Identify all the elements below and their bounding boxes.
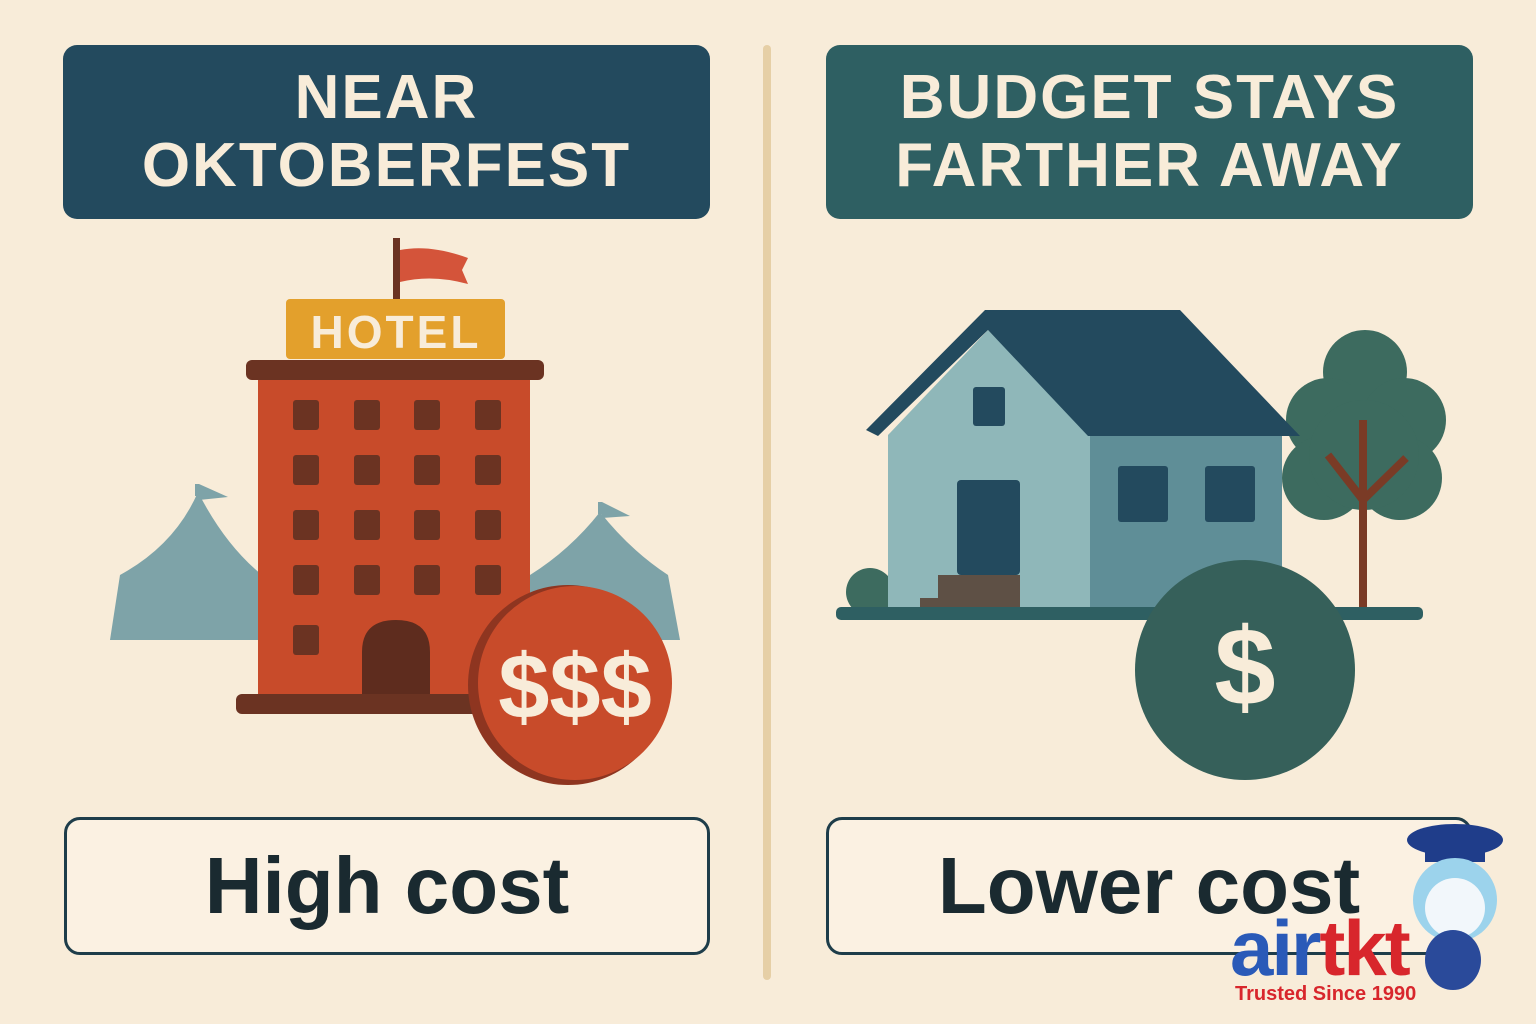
header: budget stays <box>826 45 1473 219</box>
header: near oktoberfest <box>63 45 710 219</box>
divider <box>763 45 771 980</box>
label: high cost <box>64 817 710 955</box>
icon: coin $: $ <box>1214 606 1276 729</box>
header: near oktoberfest: NEAR <box>295 63 478 132</box>
icon: hotel building <box>236 238 560 714</box>
logo: airtkt <box>1230 824 1503 1005</box>
icon: tents <box>110 484 680 640</box>
icon: tree <box>1282 330 1446 608</box>
icon: hotel building: HOTEL <box>311 306 481 358</box>
label: lower cost: Lower cost <box>938 841 1360 930</box>
icon: mascot <box>1407 824 1503 990</box>
icon: coin $ <box>1135 560 1355 780</box>
illustration: house <box>836 310 1446 780</box>
logo: airtkt: airtkt <box>1230 904 1409 992</box>
illustration: hotel <box>110 238 680 785</box>
header: budget stays: FARTHER AWAY <box>895 131 1404 200</box>
label: lower cost <box>826 817 1472 955</box>
label: high cost: High cost <box>205 841 569 930</box>
header: near oktoberfest: OKTOBERFEST <box>142 131 631 200</box>
header: budget stays: BUDGET STAYS <box>900 63 1399 132</box>
icon: coin $$$: $$$ <box>498 636 652 738</box>
icon: house <box>836 310 1423 620</box>
logo: airtkt: Trusted Since 1990 <box>1235 983 1416 1005</box>
icon: coin $$$ <box>468 585 672 785</box>
